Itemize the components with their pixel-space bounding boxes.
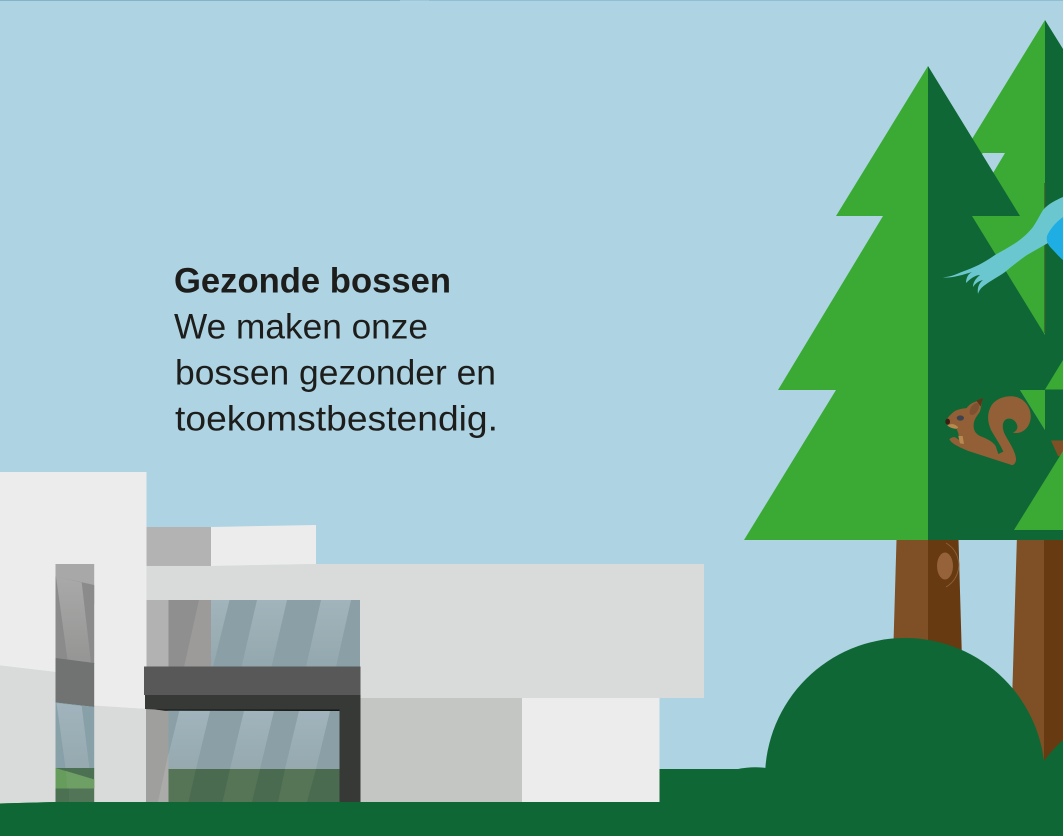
bird body [1047, 217, 1063, 260]
low right white block [522, 696, 660, 802]
crown of back tree [940, 20, 1063, 530]
squirrel eye [957, 415, 964, 421]
crown of front tree, dark half [928, 66, 1063, 540]
text block: Gezonde bossen [174, 262, 498, 438]
squirrel inner ear [968, 401, 981, 417]
roof white block [211, 525, 316, 566]
trunk of front tree [893, 540, 962, 660]
trunk knot [937, 543, 959, 587]
dark door frame [145, 695, 360, 802]
heading: Gezonde bossen [174, 262, 451, 300]
upper window [146, 600, 360, 667]
squirrel ear tip [976, 398, 983, 407]
top edge line [0, 0, 1063, 1]
tree: back tree [940, 20, 1063, 770]
squirrel cheek and chest [947, 424, 964, 444]
lower window [146, 708, 340, 802]
tree: front tree [744, 66, 1063, 660]
building [0, 472, 704, 804]
large bush [765, 638, 1045, 810]
squirrel [945, 396, 1031, 465]
body line 3: toekomstbestendig. [175, 400, 498, 438]
squirrel body and tail [946, 396, 1031, 465]
trunk of back tree [1010, 535, 1063, 770]
squirrel nose [945, 419, 950, 425]
white tower wall [0, 472, 146, 709]
body line 2: bossen gezonder en [175, 354, 496, 392]
roof grey block [146, 527, 211, 566]
crown of front tree, light half [744, 66, 928, 540]
body line 1: We maken onze [174, 308, 428, 346]
bushes [738, 638, 1063, 810]
small bush left [738, 767, 773, 775]
wide upper band [146, 564, 704, 698]
bird wing with claws [942, 197, 1063, 294]
bush right [1043, 740, 1063, 810]
dark canopy beam [144, 666, 360, 695]
low grey wall [360, 698, 522, 802]
third tree fragment at right edge [1014, 440, 1063, 530]
narrow tower window [56, 564, 94, 802]
front ground [0, 802, 1063, 836]
back ground strip [0, 769, 1063, 809]
tower lower wall [0, 666, 56, 804]
